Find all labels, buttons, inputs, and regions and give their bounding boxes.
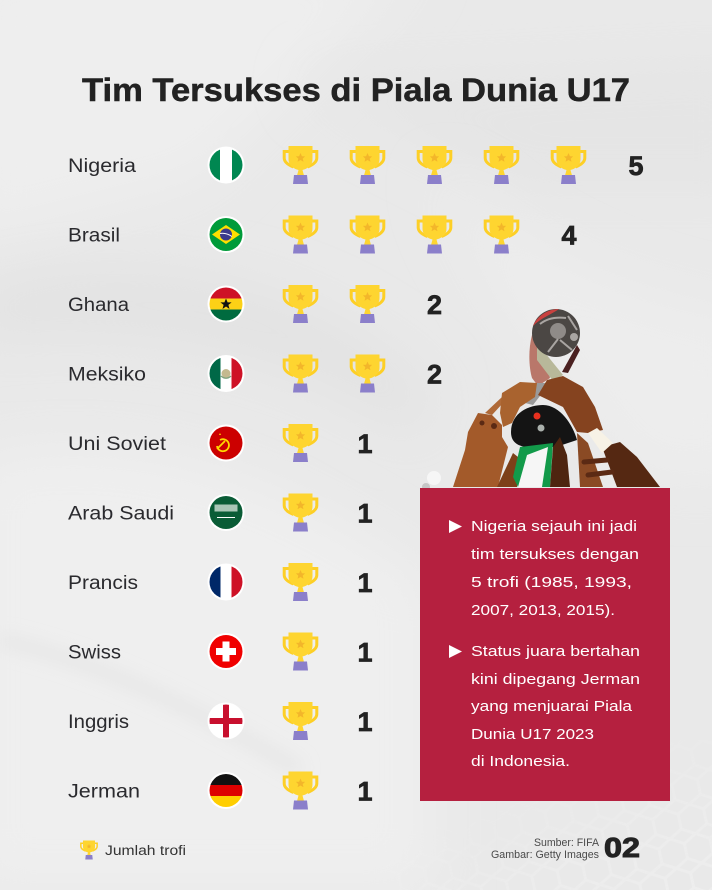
row: Uni Soviet: Uni Soviet [68, 434, 167, 455]
legend: trophy count: Jumlah trofi [105, 843, 186, 858]
trophy: 1 [284, 632, 317, 670]
left inner hand [497, 453, 518, 487]
row: Jerman [68, 772, 373, 810]
bullet: Nigeria [449, 518, 639, 619]
count: 4 [561, 220, 577, 250]
trophy: 1 [284, 702, 317, 740]
left arm and hand [453, 413, 508, 487]
flag: Uni Soviet [208, 424, 244, 462]
bullet: Jerman: yang menjuarai Piala [471, 698, 633, 715]
flag cloth [513, 443, 553, 487]
row: Brasil: Brasil [68, 226, 120, 246]
row: Inggris [68, 702, 373, 740]
trophies: 2 [284, 354, 384, 392]
count: 2 [427, 360, 442, 390]
row: Uni Soviet [68, 424, 373, 462]
bullet: Jerman: kini dipegang Jerman [471, 671, 640, 688]
photo: hands lifting the U17 trophy [422, 309, 660, 491]
row: Swiss [68, 632, 373, 670]
trophy: 1 [284, 494, 317, 532]
bullet: Nigeria: Nigeria sejauh ini jadi [471, 518, 637, 535]
right arm and fingers [602, 442, 660, 487]
row: Prancis [68, 563, 373, 601]
page number: 02 [604, 832, 640, 863]
row: Arab Saudi [68, 494, 373, 532]
flag: Arab Saudi [208, 494, 244, 531]
wristband [588, 428, 613, 453]
flag: Jerman [208, 772, 244, 809]
bullet: Jerman: Dunia U17 2023 [471, 726, 594, 743]
source credits [491, 837, 600, 861]
count: 1 [357, 498, 373, 528]
source credits: Sumber: FIFA [534, 837, 600, 849]
bullet: Jerman: di Indonesia. [471, 753, 570, 770]
row: Ghana: Ghana [68, 295, 129, 316]
count: 5 [628, 151, 644, 181]
row: Jerman: Jerman [68, 782, 140, 802]
title: Tim Tersukses di Piala Dunia U17 [82, 72, 630, 108]
trophy ball [532, 309, 580, 357]
count: 1 [357, 568, 373, 598]
trophy: 1 [284, 772, 317, 810]
row: Swiss: Swiss [68, 642, 121, 664]
flag: Meksiko [208, 355, 244, 392]
panel: key notes [420, 488, 670, 801]
flag: Nigeria [208, 146, 244, 184]
push pin [422, 471, 441, 491]
source credits: Gambar: Getty Images [491, 849, 599, 861]
bullet: Jerman [449, 643, 640, 770]
upper left hand [500, 382, 537, 427]
flag: Inggris [208, 702, 244, 740]
row: Nigeria: Nigeria [68, 156, 136, 177]
black dome [511, 405, 577, 447]
count: 1 [357, 429, 373, 459]
bullet: Nigeria: tim tersukses dengan [471, 546, 639, 563]
trophies: 4 [284, 216, 518, 254]
trophy stem and ribbons [529, 335, 550, 386]
flag: Swiss [208, 633, 244, 670]
bullet: Nigeria: 5 trofi (1985, 1993, [471, 574, 632, 591]
trophies: 2 [284, 285, 384, 323]
flag: Prancis [208, 564, 244, 600]
bullet: Nigeria: 2007, 2013, 2015). [471, 602, 615, 619]
count: 1 [357, 707, 373, 737]
row: Ghana [68, 285, 442, 323]
row: Prancis: Prancis [68, 573, 138, 594]
row: Meksiko [68, 354, 442, 392]
count: 1 [357, 776, 373, 806]
row: Nigeria [68, 146, 644, 184]
upper right hand [538, 376, 603, 433]
legend: trophy count [81, 840, 186, 860]
row: Arab Saudi: Arab Saudi [68, 504, 174, 524]
row: Brasil [68, 216, 577, 254]
inner arm [577, 433, 603, 487]
trophy: 1 [284, 563, 317, 601]
row: Inggris: Inggris [68, 712, 129, 733]
count: 2 [427, 290, 442, 320]
trophy: 1 [284, 424, 317, 462]
flag: Brasil [208, 216, 244, 253]
trophies: 5 [284, 146, 585, 184]
dark hand [550, 437, 570, 487]
count: 1 [357, 638, 373, 668]
row: Meksiko: Meksiko [68, 364, 146, 386]
flag: Ghana [208, 286, 244, 322]
bullet: Jerman: Status juara bertahan [471, 643, 640, 660]
